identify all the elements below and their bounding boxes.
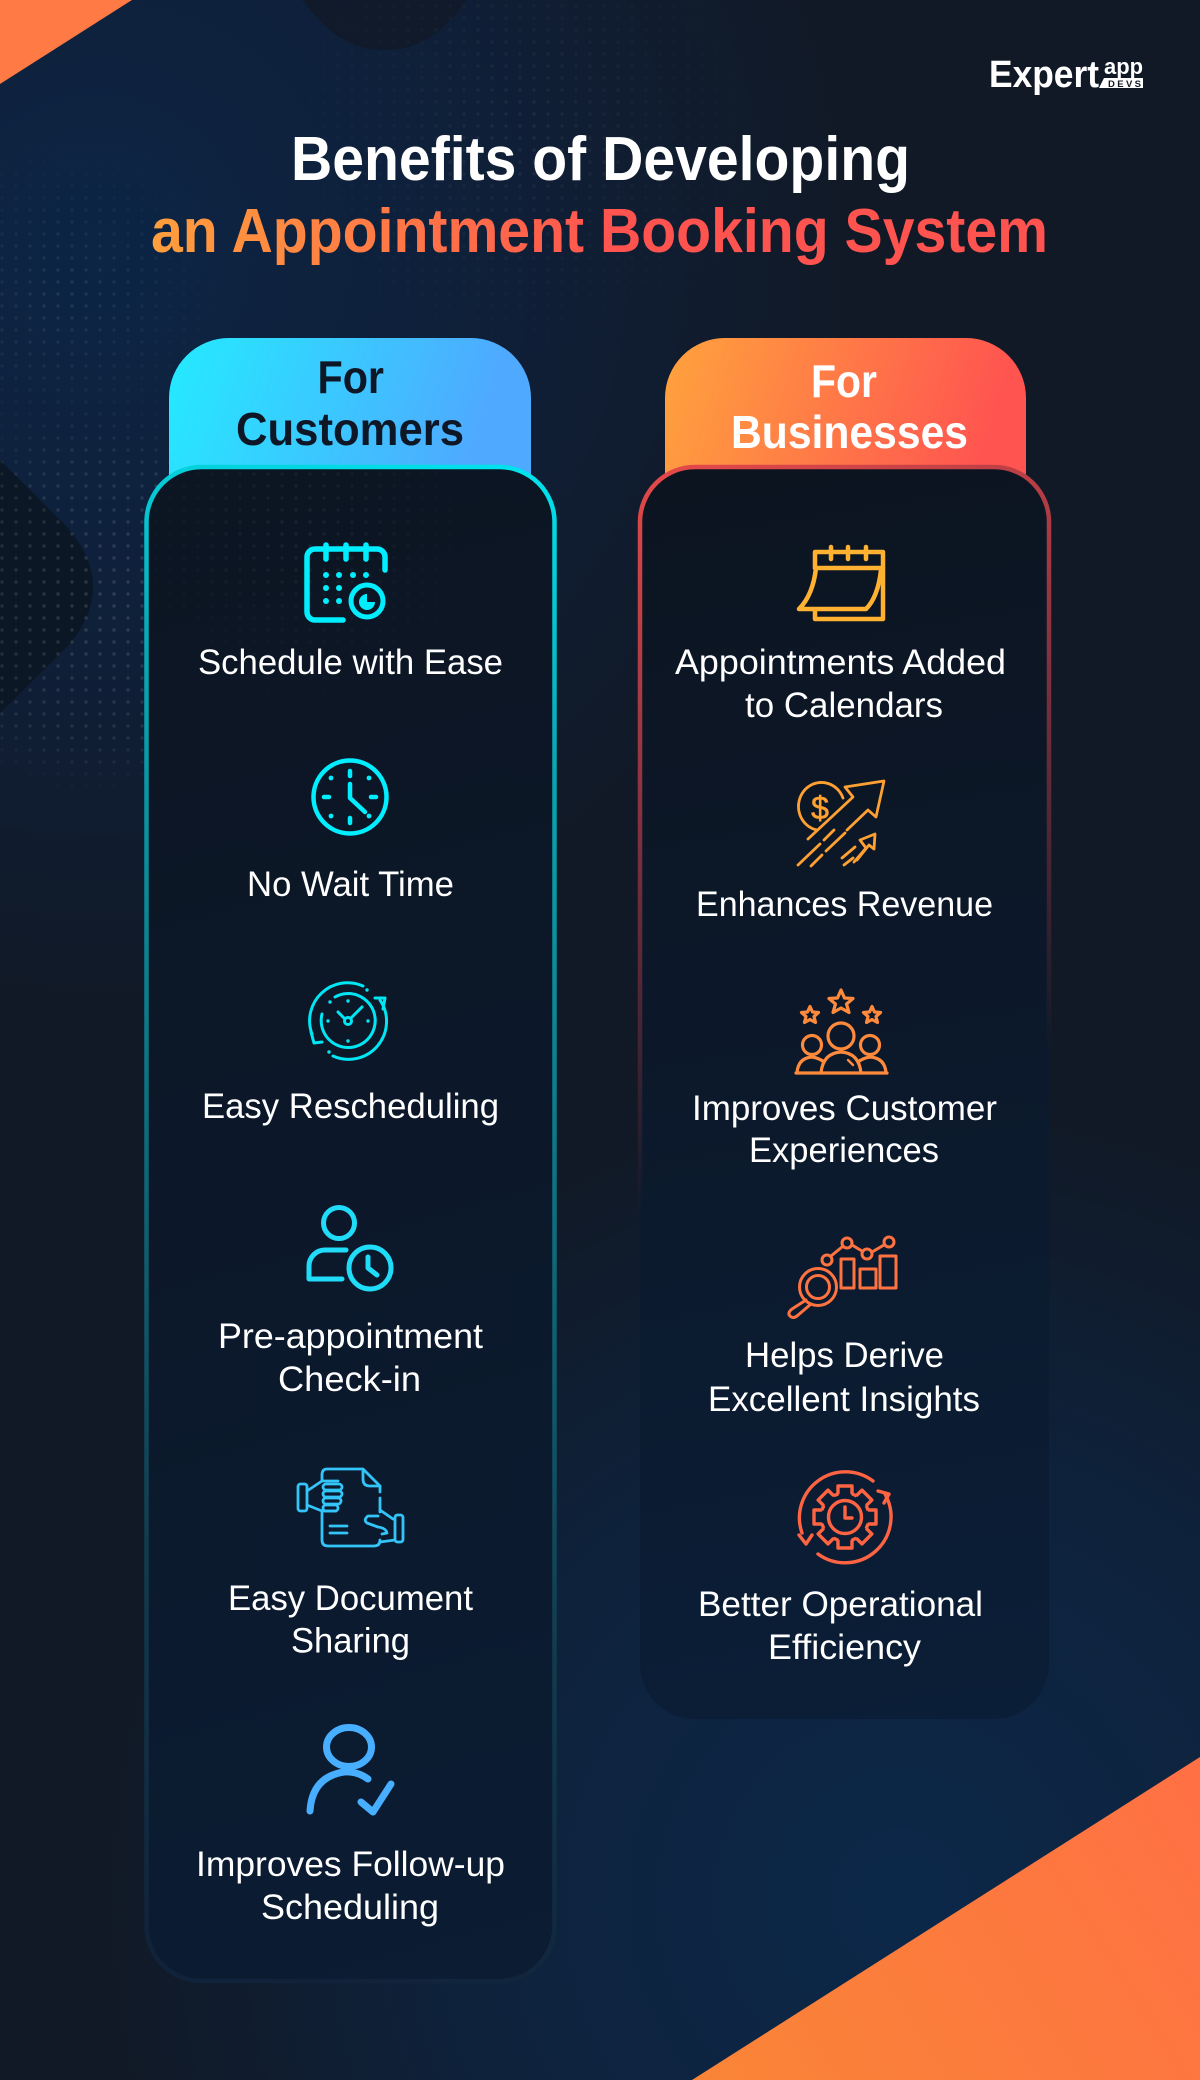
- orange triangle top left: [0, 0, 132, 84]
- item: helps derive excellent insights: [708, 1237, 980, 1419]
- logo: Expert: [989, 54, 1099, 96]
- tab: for businesses: Businesses: [731, 406, 968, 458]
- title: an Appointment Booking System: [151, 197, 1048, 266]
- label: No Wait Time: [247, 865, 454, 904]
- icon: person with check: [310, 1728, 391, 1812]
- halftone dots: [0, 40, 618, 775]
- label: dollar sign: $: [811, 790, 829, 826]
- title: [151, 125, 1048, 266]
- label: Easy Rescheduling: [202, 1087, 499, 1126]
- label: Better Operational: [698, 1585, 983, 1624]
- icon: calendar with clock: [307, 545, 385, 620]
- dark rounded shape top: [302, 0, 467, 50]
- item: enhances revenue: [696, 781, 993, 924]
- label: Sharing: [291, 1622, 410, 1660]
- label: [692, 1089, 997, 1170]
- item: appointments added to calendars: [675, 547, 1006, 725]
- orange triangle bottom right: [692, 1757, 1200, 2080]
- item: easy document sharing: [228, 1469, 473, 1660]
- label: Easy Document: [228, 1579, 473, 1618]
- icon: gear with clock and arrows: [799, 1472, 891, 1563]
- label: [675, 643, 1006, 725]
- logo: DEVS: [1108, 79, 1141, 90]
- icon: magnifier and chart: [789, 1237, 896, 1318]
- label: Improves Follow-up: [196, 1845, 505, 1884]
- item: improves customer experiences: [692, 990, 997, 1170]
- label: Check-in: [278, 1360, 421, 1399]
- label: Excellent Insights: [708, 1380, 980, 1419]
- label: Pre-appointment: [218, 1317, 483, 1356]
- label: Schedule with Ease: [198, 643, 503, 682]
- panel: customers: [146, 467, 554, 1981]
- icon: people with stars: [796, 990, 887, 1073]
- label: Improves Customer: [692, 1089, 997, 1128]
- label: Experiences: [749, 1131, 939, 1170]
- tab: for businesses: For: [811, 355, 877, 407]
- item: no wait time: [247, 760, 454, 904]
- tab: for businesses: [665, 338, 1026, 490]
- label: Efficiency: [768, 1628, 921, 1667]
- icon: dollar coin and arrows: [798, 781, 884, 866]
- icon: hands sharing a document: [298, 1469, 403, 1546]
- logo: app: [1104, 54, 1143, 79]
- label: Appointments Added: [675, 643, 1006, 682]
- label: Scheduling: [261, 1888, 439, 1927]
- label: [196, 1845, 505, 1927]
- tab: for customers: For: [318, 351, 384, 403]
- dark rounded diamond left: [0, 460, 93, 713]
- item: schedule with ease: [198, 545, 503, 682]
- label: Enhances Revenue: [696, 885, 993, 924]
- tab: for customers: [169, 338, 531, 490]
- panel: businesses: [640, 467, 1049, 1719]
- item: pre-appointment check-in: [218, 1208, 483, 1399]
- icon: clock with circular arrows: [310, 983, 387, 1059]
- label: Helps Derive: [745, 1336, 944, 1375]
- label: [228, 1579, 473, 1660]
- icon: calendar page: [799, 547, 883, 619]
- label: [698, 1585, 983, 1667]
- tab: for customers: Customers: [236, 403, 464, 455]
- item: better operational efficiency: [698, 1472, 983, 1667]
- icon: clock: [314, 760, 386, 834]
- label: to Calendars: [745, 686, 943, 725]
- label: [218, 1317, 483, 1399]
- item: improves follow-up scheduling: [196, 1728, 505, 1927]
- item: easy rescheduling: [202, 983, 499, 1126]
- title: Benefits of Developing: [291, 125, 910, 194]
- icon: person with clock: [309, 1208, 391, 1289]
- label: [708, 1336, 980, 1419]
